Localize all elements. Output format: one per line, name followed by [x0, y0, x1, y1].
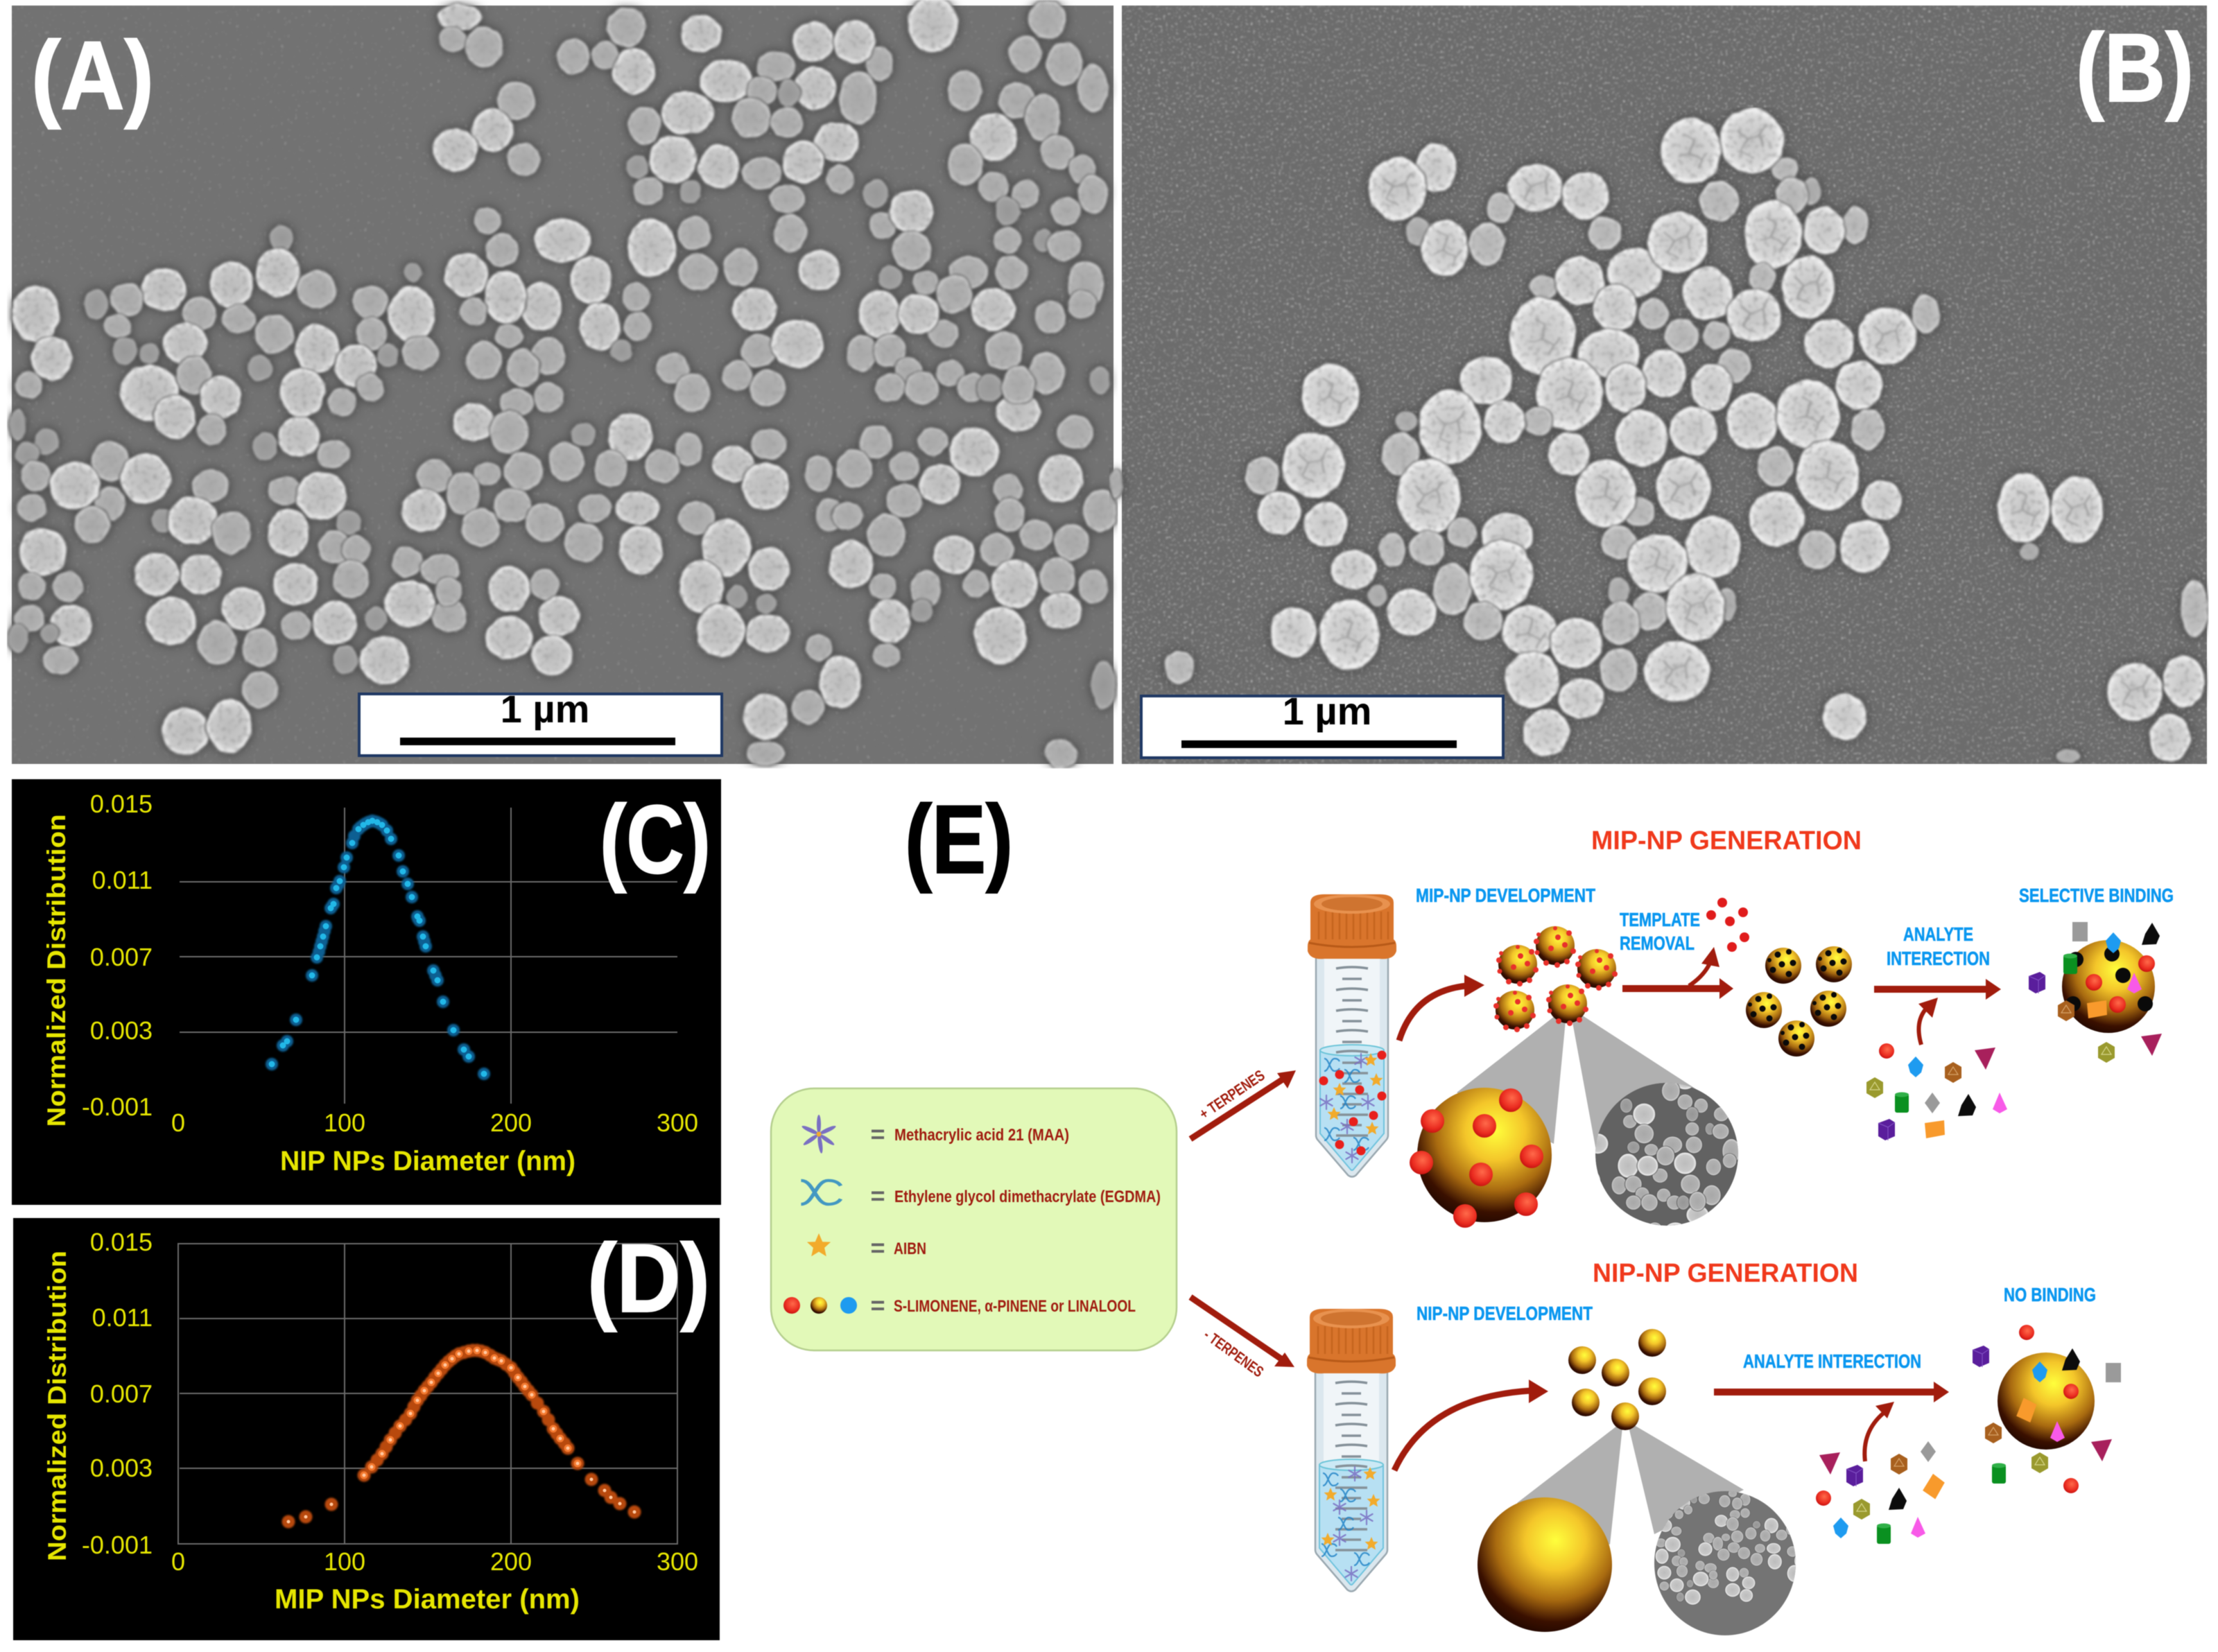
y axis labels D: 0.003: [90, 1454, 153, 1482]
legend text: EGDMA: Ethylene glycol dimethacrylate (EGDMA): [894, 1188, 1161, 1206]
x axis labels C: [171, 1108, 698, 1137]
x axis labels D: 200: [490, 1547, 532, 1576]
arrow: analyte interaction NIP: [1714, 1382, 1949, 1461]
legend icon: AIBN star: [807, 1233, 831, 1256]
legend box: [771, 1088, 1177, 1350]
legend icon: methacrylic acid: [801, 1115, 837, 1154]
x axis title D: MIP NPs Diameter (nm): [275, 1584, 580, 1615]
panel label C: (C): [600, 785, 711, 894]
heading: no binding: NO BINDING: [2004, 1284, 2096, 1305]
curved arrow to MIP NPs: [1399, 975, 1484, 1041]
legend text: MAA: Methacrylic acid 21 (MAA): [894, 1126, 1069, 1145]
label: analyte interection: [1887, 923, 1990, 969]
label: analyte interection: ANALYTE: [1903, 923, 1973, 945]
y axis labels C: 0.003: [90, 1016, 153, 1045]
x axis labels C: 200: [490, 1108, 532, 1137]
large MIP sphere with templates: [1410, 1088, 1552, 1228]
y axis labels D: -0.001: [82, 1531, 153, 1559]
panel label B: (B): [2076, 13, 2194, 122]
label: template removal: TEMPLATE: [1620, 909, 1700, 930]
data points C: [272, 821, 484, 1074]
arrow: template removal: [1622, 947, 1733, 999]
arrow: analyte interaction: [1874, 979, 2001, 1045]
heading: selective binding: SELECTIVE BINDING: [2019, 885, 2174, 906]
panel E: MIP and NIP generation schematic: [771, 785, 2174, 1640]
scale bar B: 1 µm: [1283, 689, 1371, 733]
x axis labels C: 0: [171, 1108, 185, 1137]
legend text: AIBN: AIBN: [894, 1240, 926, 1258]
label: template removal: [1620, 909, 1700, 954]
y axis labels C: -0.001: [82, 1093, 153, 1121]
curved arrow to NIP NPs: [1394, 1380, 1548, 1470]
panel A: SEM micrograph of NIP nanoparticles: [7, 0, 1118, 768]
legend equals signs: =: [870, 1181, 885, 1210]
legend equals signs: [870, 1120, 885, 1319]
y axis labels D: [82, 1228, 153, 1559]
scale bar A: [359, 687, 722, 756]
SEM inset: MIP: [1595, 1083, 1739, 1226]
no binding sphere: [1973, 1325, 2121, 1493]
y axis title C: Normalized Distribution: [42, 815, 71, 1127]
label: analyte interection: INTERECTION: [1887, 948, 1990, 969]
legend icon: EGDMA: [801, 1181, 841, 1204]
y axis labels D: 0.007: [90, 1380, 153, 1408]
tube: NIP pre-polymer mixture: [1307, 1309, 1396, 1592]
NIP nanoparticle cluster: [1568, 1329, 1666, 1430]
panel C: NIP size distribution chart: [12, 779, 721, 1205]
arrow: + terpenes: [1190, 1070, 1296, 1139]
y axis labels C: 0.011: [92, 866, 153, 894]
SEM inset: NIP: [1654, 1490, 1796, 1636]
title: MIP-NP generation: MIP-NP GENERATION: [1591, 826, 1862, 855]
MIP nanoparticle cluster: [1493, 926, 1618, 1032]
selective binding sphere: [2029, 922, 2162, 1063]
removed template dots: [1706, 898, 1749, 952]
x axis labels C: 300: [657, 1108, 698, 1137]
analyte shapes: [1866, 1043, 2007, 1140]
y axis labels D: 0.015: [90, 1228, 153, 1256]
y axis labels C: [82, 790, 153, 1121]
y axis labels C: 0.007: [90, 943, 153, 971]
imprinted nanoparticles: [1746, 946, 1852, 1057]
data points D: [288, 1350, 634, 1522]
legend text: terpenes: S-LIMONENE, α-PINENE or LINALOOL: [894, 1297, 1136, 1316]
label: analyte interection NIP: ANALYTE INTERECTION: [1743, 1350, 1921, 1372]
panel B: SEM micrograph of MIP nanoparticles: [1109, 6, 2208, 764]
heading: MIP-NP development: MIP-NP DEVELOPMENT: [1416, 885, 1595, 906]
panel label E: (E): [905, 785, 1013, 894]
heading: NIP-NP development: NIP-NP DEVELOPMENT: [1416, 1303, 1593, 1324]
legend icon: terpene balls: [783, 1297, 857, 1314]
legend equals signs: =: [870, 1291, 885, 1319]
zoom cones: [1457, 1007, 1704, 1154]
x axis labels D: 100: [324, 1547, 365, 1576]
arrow: - terpenes: [1190, 1297, 1294, 1367]
large NIP sphere: [1478, 1497, 1612, 1632]
label: + terpenes: + TERPENES: [1196, 1066, 1268, 1122]
x axis title C: NIP NPs Diameter (nm): [280, 1146, 575, 1176]
title: NIP-NP generation: NIP-NP GENERATION: [1593, 1259, 1858, 1288]
x axis labels C: 100: [324, 1108, 365, 1137]
x axis labels D: [171, 1547, 698, 1576]
legend equals signs: =: [870, 1233, 885, 1262]
scale bar A: 1 µm: [501, 687, 589, 731]
label: - terpenes: - TERPENES: [1201, 1325, 1267, 1380]
scale bar B: [1141, 689, 1503, 758]
zoom cones NIP: [1517, 1421, 1744, 1545]
x axis labels D: 0: [171, 1547, 185, 1576]
y axis labels D: 0.011: [92, 1303, 153, 1332]
tube: MIP pre-polymer mixture: [1308, 894, 1396, 1177]
x axis labels D: 300: [657, 1547, 698, 1576]
panel label A: (A): [31, 21, 154, 130]
legend equals signs: =: [870, 1120, 885, 1148]
panel label D: (D): [587, 1224, 710, 1332]
y axis title D: Normalized Distribution: [43, 1251, 71, 1561]
label: template removal: REMOVAL: [1620, 932, 1695, 954]
y axis labels C: 0.015: [90, 790, 153, 818]
panel D: MIP size distribution chart: [13, 1218, 720, 1640]
analyte shapes NIP: [1816, 1441, 1948, 1544]
